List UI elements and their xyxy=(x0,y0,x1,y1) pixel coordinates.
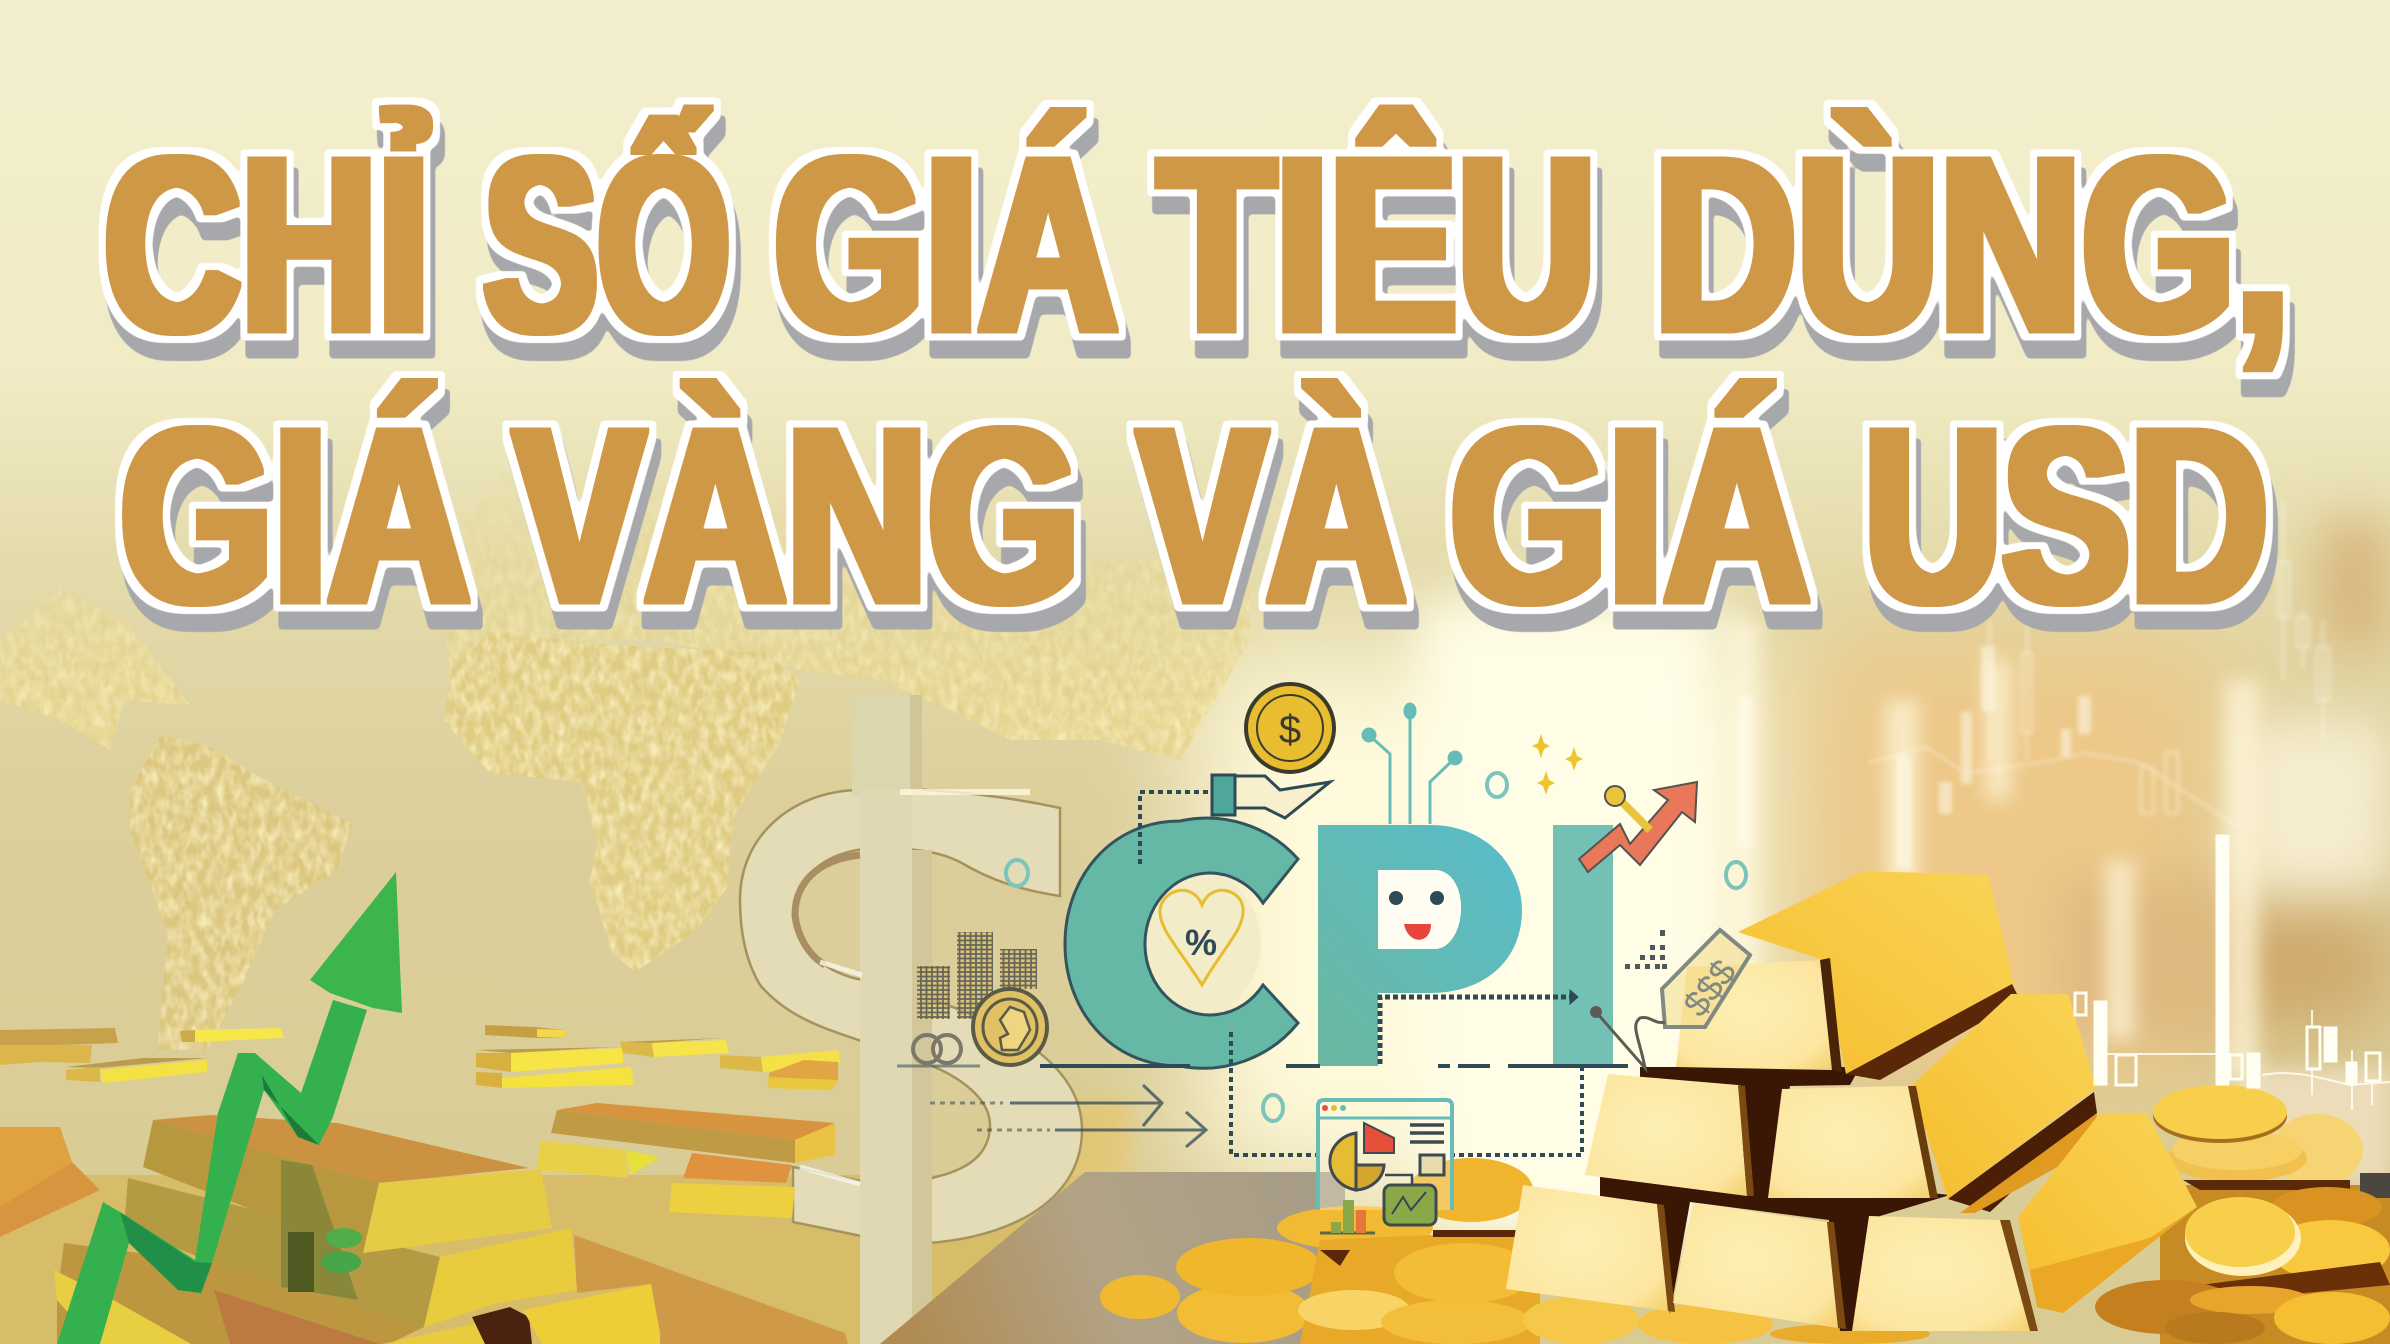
title line 1: SỐ xyxy=(484,105,730,384)
icon: hand xyxy=(1212,775,1330,818)
distant gold bars xyxy=(0,1025,841,1237)
dollar sign xyxy=(740,695,1082,1344)
letter I xyxy=(1553,825,1613,1066)
title line 2: USD xyxy=(1864,376,2268,655)
faded northern continents xyxy=(0,470,1250,760)
background glow and streaks xyxy=(0,520,2390,1344)
title line 2: GIÁ xyxy=(1450,376,1810,655)
CPI lettering xyxy=(897,684,1750,1233)
South America xyxy=(130,735,352,1050)
Africa xyxy=(444,632,800,972)
title line 1: CHỈ xyxy=(104,105,430,384)
gold coins pile xyxy=(1100,1085,2390,1344)
dark gaps between bars xyxy=(1600,1067,1950,1331)
title line 1: TIÊU xyxy=(1158,105,1596,384)
top bar xyxy=(1738,871,2014,1074)
icon: coin stacks xyxy=(913,932,1047,1065)
bottom row xyxy=(2018,1113,2197,1313)
small circles xyxy=(1006,773,1746,1121)
title xyxy=(104,105,2290,655)
middle row xyxy=(1911,994,2096,1199)
icon: dollar coin xyxy=(1246,684,1334,772)
title line 2 xyxy=(120,376,2268,655)
green rising arrow xyxy=(57,872,402,1344)
icon: price tag: $$$ xyxy=(1675,951,1744,1024)
icon: rising orange arrow with key xyxy=(1579,782,1697,872)
sparkles xyxy=(1532,734,1583,795)
table surface xyxy=(880,1172,1345,1344)
world map in gold relief xyxy=(0,470,1250,1050)
title line 2: VÀNG xyxy=(514,376,1080,655)
icon: heart with percent: % xyxy=(1185,922,1217,963)
gold bar stack left xyxy=(54,1115,848,1344)
letter P xyxy=(1318,825,1522,1066)
antennae xyxy=(1363,704,1461,824)
upper faint candles xyxy=(1662,500,2329,867)
title line 2: GIÁ xyxy=(120,376,470,655)
letter C xyxy=(1065,818,1298,1068)
title line 1 xyxy=(104,105,2290,384)
icon: price tag xyxy=(1590,930,1750,1068)
title line 2: VÀ xyxy=(1138,376,1406,655)
title line 1: GIÁ xyxy=(774,105,1118,384)
robot face xyxy=(1378,870,1461,949)
icon: dollar coin: $ xyxy=(1279,708,1301,752)
connector lines xyxy=(897,792,1628,1155)
candlestick chart xyxy=(1662,500,2390,1110)
icon: heart with percent xyxy=(1160,890,1243,985)
gold bar pyramid xyxy=(1506,871,2197,1331)
lower bright candles xyxy=(2075,993,2086,1015)
icon: dashboard window xyxy=(1316,1100,1452,1233)
icon: dot triangle xyxy=(1625,930,1667,969)
